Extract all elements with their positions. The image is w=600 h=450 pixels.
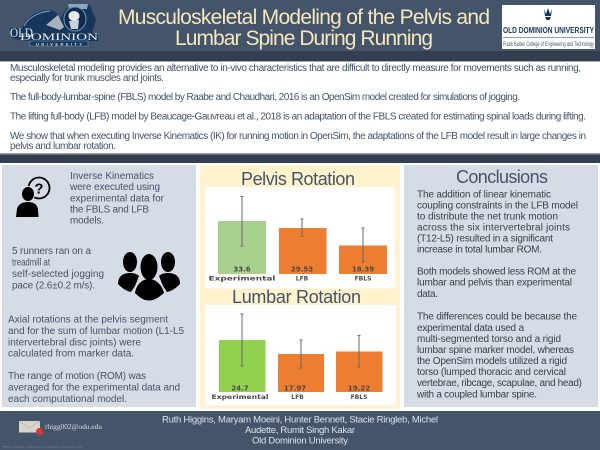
text: runners: pace (2.6±0.2 m/s). [12,280,95,292]
bar chart: lumbar rotation: 19.22 [348,384,370,392]
text: conclusions body: the OpenSim models utilized a rigid [417,356,567,367]
heading: pelvis rotation: Pelvis Rotation [241,169,355,189]
panel: results [200,165,400,409]
text: conclusions body [416,190,582,400]
bar chart: lumbar rotation: Experimental [212,394,268,401]
title: Lumbar Spine During Running [175,27,433,50]
bar chart: pelvis rotation [205,187,395,288]
authors and affiliation: Ruth Higgins, Maryam Moeini, Hunter Bennett, Stacie Ringleb, Michel [162,414,438,426]
bar chart: pelvis rotation: 18.39 [352,266,374,274]
heading: lumbar rotation: Lumbar Rotation [232,287,361,307]
bar chart: lumbar rotation: 24.7 [231,384,249,392]
contact email: rhigg002@odu.edu [45,422,102,431]
header banner [0,0,600,61]
text: axial rotations: intervertebral disc joints) were [8,338,141,348]
logo: Old Dominion athletic mark: DOMINION [20,33,98,43]
logo: Old Dominion University college [502,5,595,49]
icon: person with question bubble [16,178,50,217]
text: conclusions body: with a coupled lumbar spine. [416,390,537,400]
text: conclusions body: coupling constraints in the LFB model [417,200,578,212]
text: runners [12,246,104,292]
text: conclusions body: across the six intervertebral joints [417,222,570,234]
text: conclusions body: increase in total lumbar ROM. [417,244,542,256]
logo: Old Dominion athletic mark: UNIVERSITY [36,41,82,46]
text: runners: self-selected jogging [12,269,104,280]
text: conclusions body: to distribute the net trunk motion [417,212,558,222]
bar chart: lumbar rotation: FBLS [351,394,367,401]
text: axial rotations: Axial rotations at the pelvis segment [8,314,168,326]
text: inverse kinematics: Inverse Kinematics [70,171,154,182]
text: conclusions body: data. [417,289,438,300]
introduction text block: pelvis and lumbar rotation. [10,141,116,152]
heading: conclusions: Conclusions [456,167,548,187]
title [118,6,490,50]
section divider strip [0,154,600,163]
text: inverse kinematics: were executed using [69,182,160,193]
text: runners: treadmill at [12,258,50,268]
introduction text block: Musculoskeletal modeling provides an alternative to in-vivo characteristics that are difficult to directly measure for movements such as running, [10,63,581,74]
text: conclusions body: lumbar and pelvis than experimental [417,278,572,288]
text: axial rotations: calculated from marker data. [8,348,134,360]
text: conclusions body: multi-segmented torso and a rigid [417,334,561,345]
icon: email envelope [19,421,43,435]
logo: Old Dominion athletic mark [10,4,98,46]
authors and affiliation [162,414,438,446]
text: axial rotations: averaged for the experimental data and [8,382,180,394]
introduction text block: The full-body-lumbar-spine (FBLS) model by Raabe and Chaudhari, 2016 is an OpenSim model created for simulations of jogging. [10,92,520,103]
bar chart: pelvis rotation: Experimental [208,276,276,282]
fine print credit: Poster template credit and presentation information line [2,446,83,448]
text: conclusions body: lumbar spine marker model, whereas [417,345,574,356]
text: conclusions body: vertebrae, ribcage, scapulae, and head) [417,378,582,389]
panel: methods [2,165,196,407]
text: conclusions body: The addition of linear kinematic [417,190,551,200]
text: runners: 5 runners ran on a [12,246,91,257]
text: inverse kinematics: models. [70,216,104,226]
text: axial rotations: each computational model. [8,394,127,405]
bar chart: pelvis rotation: LFB [296,276,309,282]
text: conclusions body: experimental data used a [417,323,524,334]
introduction text block: especially for trunk muscles and joints. [10,73,164,84]
text: conclusions body: (T12-L5) resulted in a significant [417,234,553,244]
bar chart: lumbar rotation [205,305,396,406]
text: axial rotations: The range of motion (ROM) was [8,371,146,382]
text: axial rotations: and for the sum of lumbar motion (L1-L5 [8,326,184,337]
footer band [0,411,600,450]
text: inverse kinematics [69,171,165,226]
bar chart: lumbar rotation: LFB [291,394,304,401]
authors and affiliation: Audette, Rumit Singh Kakar [245,425,355,436]
bar chart: lumbar rotation: 17.97 [284,384,306,392]
icon: group of people [118,252,180,300]
icon: person with question bubble: ? [34,180,44,198]
text: conclusions body: Both models showed less ROM at the [417,266,576,278]
logo: Old Dominion athletic mark: OLD [10,25,33,40]
introduction text block: The lifting full-body (LFB) model by Beaucage-Gauvreau et al., 2018 is an adaptation of the FBLS created for estimating spinal loads during lifting. [10,112,586,122]
introduction text block: We show that when executing Inverse Kinematics (IK) for running motion in OpenSim, the adaptations of the LFB model result in large changes in [10,131,586,142]
text: inverse kinematics: experimental data for [70,194,165,204]
text: axial rotations [8,314,184,405]
text: conclusions body: torso (lumped thoracic and cervical [417,367,566,378]
bar chart: pelvis rotation: FBLS [355,276,371,282]
bar chart: pelvis rotation: 33.6 [233,266,251,274]
panel: conclusions [404,165,598,407]
text: inverse kinematics: the FBLS and LFB [70,204,149,216]
text: conclusions body: The differences could be because the [417,312,577,322]
authors and affiliation: Old Dominion University [252,436,348,446]
introduction text block [0,61,600,154]
bar chart: pelvis rotation: 29.53 [291,266,313,274]
title: Musculoskeletal Modeling of the Pelvis and [118,6,490,29]
